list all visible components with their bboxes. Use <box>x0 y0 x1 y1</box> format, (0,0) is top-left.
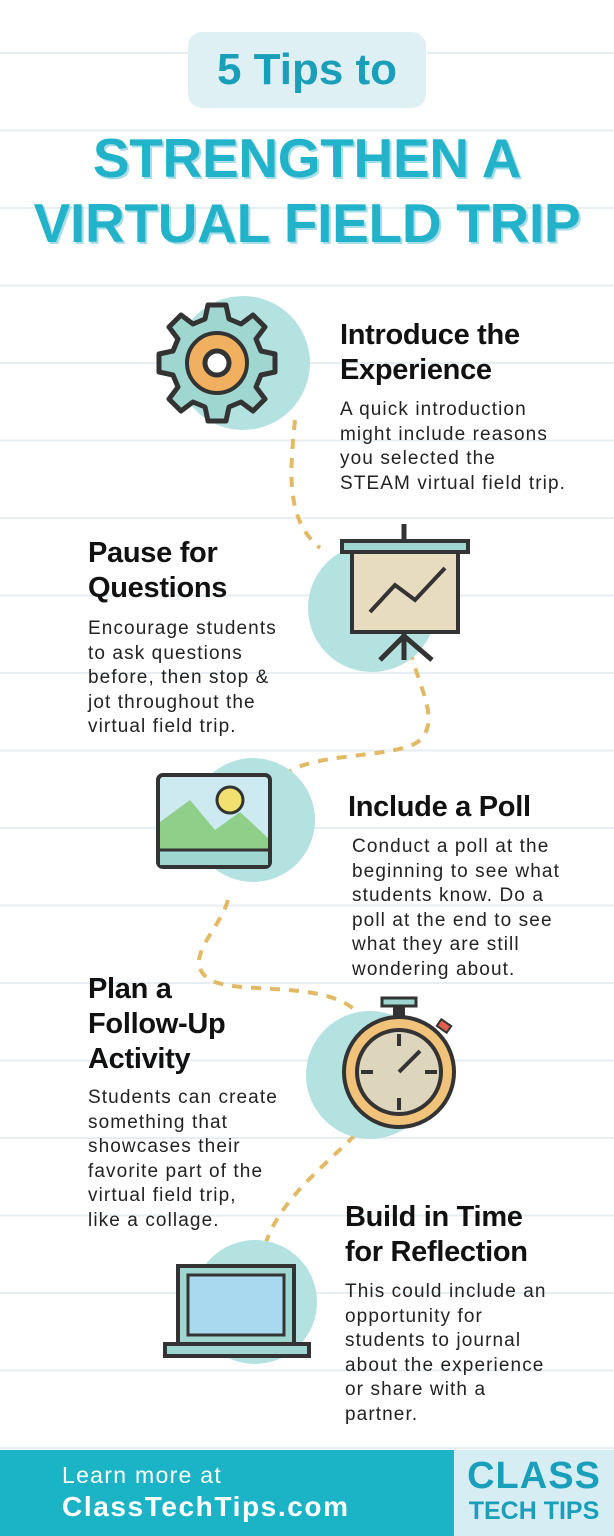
heading: Include a Poll <box>348 791 531 823</box>
icon: stopwatch <box>306 996 456 1139</box>
body text: STEAM virtual field trip. <box>340 472 566 494</box>
footer text <box>62 1462 350 1522</box>
logo <box>454 1450 614 1536</box>
title: VIRTUAL FIELD TRIP <box>34 192 580 254</box>
logo: TECH TIPS <box>469 1497 599 1525</box>
body text: or share with a <box>345 1379 486 1400</box>
footer text: ClassTechTips.com <box>62 1491 350 1522</box>
logo: CLASS <box>467 1455 601 1497</box>
body text: This could include an <box>345 1281 547 1302</box>
heading: Follow-Up <box>88 1008 225 1040</box>
tip 3: poll <box>156 758 560 980</box>
body text <box>345 1281 547 1424</box>
body text: might include reasons <box>340 424 548 444</box>
body text <box>340 399 566 494</box>
body text: what they are still <box>352 934 520 955</box>
body text: poll at the end to see <box>352 910 553 930</box>
body text: virtual field trip. <box>88 716 237 737</box>
subtitle badge <box>188 32 426 108</box>
body text: A quick introduction <box>340 399 527 420</box>
heading: Build in Time <box>345 1201 523 1233</box>
heading: Activity <box>88 1043 190 1075</box>
tip 1: introduce <box>156 296 566 494</box>
tip 4: follow-up <box>88 973 456 1230</box>
body text: Encourage students <box>88 618 277 639</box>
body text: like a collage. <box>88 1210 220 1230</box>
heading <box>345 1201 528 1268</box>
footer <box>0 1450 614 1536</box>
subtitle badge: 5 Tips to <box>217 45 397 94</box>
body text: wondering about. <box>352 958 515 980</box>
heading: Plan a <box>88 973 172 1005</box>
body text: beginning to see what <box>352 860 560 882</box>
heading: for Reflection <box>345 1236 528 1268</box>
icon: picture <box>156 758 315 882</box>
footer text: Learn more at <box>62 1462 222 1488</box>
body text: about the experience <box>345 1354 544 1376</box>
body text: students to journal <box>345 1330 521 1351</box>
tip 5: reflection <box>163 1201 547 1424</box>
icon: presentation easel <box>308 524 470 672</box>
body text: you selected the <box>340 448 496 469</box>
heading: Experience <box>340 354 492 386</box>
body text <box>88 1087 278 1230</box>
body text: Conduct a poll at the <box>352 836 549 857</box>
body text: students know. Do a <box>352 885 544 906</box>
tip 2: pause <box>88 524 470 737</box>
body text: favorite part of the <box>88 1160 263 1182</box>
body text <box>352 836 560 980</box>
body text: jot throughout the <box>88 692 256 712</box>
body text: showcases their <box>88 1136 241 1157</box>
title: STRENGTHEN A <box>93 127 521 189</box>
body text: partner. <box>345 1404 418 1424</box>
body text: before, then stop & <box>88 667 269 688</box>
icon: gear <box>156 296 310 430</box>
heading: Questions <box>88 572 227 604</box>
body text: to ask questions <box>88 642 243 664</box>
heading: Pause for <box>88 537 217 569</box>
body text <box>88 618 277 737</box>
title <box>34 127 581 254</box>
icon: laptop <box>163 1240 317 1364</box>
heading: Introduce the <box>340 319 520 351</box>
heading <box>88 973 225 1075</box>
body text: Students can create <box>88 1087 278 1108</box>
body text: opportunity for <box>345 1306 483 1326</box>
body text: virtual field trip, <box>88 1185 237 1206</box>
heading <box>88 537 227 604</box>
heading <box>340 319 520 386</box>
body text: something that <box>88 1112 228 1132</box>
